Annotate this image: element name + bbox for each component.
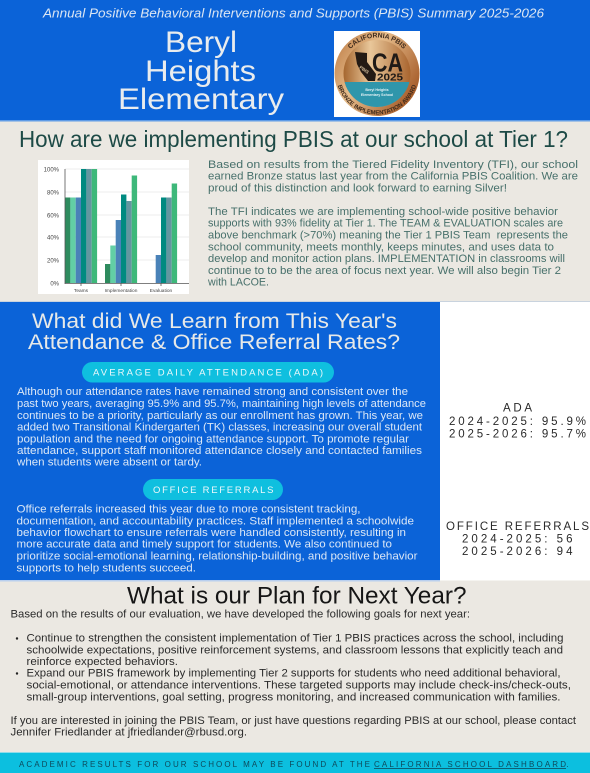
school name: Elementary — [118, 83, 284, 116]
footer band: . — [566, 760, 569, 769]
header band — [0, 0, 590, 122]
text block: attendance: continues to be a priority, particularly as our enrollment has grown. This year, we — [17, 410, 423, 422]
text block: attendance: Although our attendance rates have remained strong and consistent over the — [17, 386, 408, 398]
heading: attendance and referrals — [28, 309, 400, 354]
text block: TFI results: school community, meets monthly, keeps minutes, and uses data to — [208, 241, 554, 253]
stats: ADA — [449, 403, 586, 441]
text block: TFI results: The TFI indicates we are implementing school-wide positive behavior — [208, 206, 558, 218]
list: goals: schoolwide expectations, positive reinforcement systems, and classroom lessons that explicitly teach and — [26, 644, 563, 656]
footer band — [0, 752, 590, 773]
list: goals: Continue to strengthen the consistent implementation of Tier 1 PBIS practices across the school, including — [26, 633, 564, 645]
text block: TFI results: proud of this distinction and look forward to earning Silver! — [208, 182, 507, 194]
badge: California PBIS bronze award — [334, 31, 420, 117]
badge: California PBIS bronze award: Beryl Heights — [365, 88, 389, 92]
panel: attendance and referrals — [0, 301, 590, 582]
text block: TFI results — [207, 159, 578, 289]
stats: ADA: 2025-2026: 95.7% — [449, 429, 586, 441]
badge: California PBIS bronze award: BRONZE IMPLEMENTATION AWARD — [338, 84, 416, 114]
heading: Tier 1: How are we implementing PBIS at our school at Tier 1? — [19, 126, 568, 152]
pill: office referrals — [143, 479, 283, 500]
text block: referrals: supports to help students succeed. — [16, 562, 196, 574]
text block: attendance: population and the need for ongoing attendance support. To promote regular — [17, 433, 410, 445]
text block: TFI results: supports with 93% fidelity at Tier 1. The TEAM & EVALUATION scales are — [208, 218, 563, 230]
bars: Teams — [65, 169, 97, 283]
text block: contact: If you are interested in joining the PBIS Team, or just have questions regarding PBIS at our school, please contact — [10, 715, 576, 727]
text block: attendance — [16, 386, 426, 469]
text block: referrals: Office referrals increased this year due to more consistent tracking, — [16, 504, 360, 516]
text block: TFI results: develop and monitor action plans. IMPLEMENTATION in classrooms will — [208, 253, 565, 265]
school name: Heights — [145, 55, 256, 88]
stats: office referrals: 2025-2026: 94 — [462, 546, 573, 558]
text block: TFI results: earned Bronze status last year from the California PBIS Coalition. We are — [208, 171, 578, 183]
text block: attendance: when students were absent or tardy. — [16, 457, 202, 469]
footer band: CALIFORNIA SCHOOL DASHBOARD — [374, 760, 566, 769]
text block: attendance: added two Transitional Kindergarten (TK) classes, increasing our overall student — [17, 422, 422, 434]
text block: TFI results: with LACOE. — [207, 277, 269, 289]
text block: referrals: more accurate data and timely support for students. We also continued to — [16, 539, 392, 551]
badge: California PBIS bronze award: CALIFORNIA PBIS — [348, 32, 406, 48]
bars: Evaluation — [156, 184, 177, 283]
pill: average daily attendance: AVERAGE DAILY ATTENDANCE (ADA) — [93, 368, 323, 378]
list: goals: reinforce expected behaviors. — [26, 656, 178, 668]
heading: plan for next year: What is our Plan for Next Year? — [127, 582, 466, 609]
bars: Implementation — [105, 176, 137, 283]
text block: TFI results: Based on results from the Tiered Fidelity Inventory (TFI), our school — [208, 159, 578, 171]
text block: referrals: behavior flowchart to ensure referrals were handled consistently, resulting in — [16, 527, 406, 539]
list: goals — [16, 633, 571, 703]
stats: ADA: 2024-2025: 95.9% — [449, 416, 586, 428]
text block: plan intro: Based on the results of our evaluation, we have developed the following goals for next year: — [10, 609, 470, 621]
badge: California PBIS bronze award: CA — [372, 48, 403, 78]
list: goals: small-group interventions, goal setting, progress monitoring, and increased communication with families. — [26, 691, 560, 703]
bar chart: TFI scales — [38, 160, 189, 294]
pill: office referrals: OFFICE REFERRALS — [153, 485, 274, 496]
heading: attendance and referrals: What did We Learn from This Year's — [32, 309, 397, 333]
bar chart: TFI scales: Teams — [74, 288, 89, 294]
stats: ADA: ADA — [503, 403, 532, 415]
text block: referrals — [16, 504, 418, 574]
stats: office referrals: 2024-2025: 56 — [462, 534, 572, 546]
text block: contact — [10, 715, 576, 739]
list: goals: social-emotional, or attendance interventions. These targeted supports may include check-ins/check-outs, — [26, 679, 571, 691]
footer band: ACADEMIC RESULTS FOR OUR SCHOOL MAY BE FOUND AT THE — [19, 760, 370, 769]
badge: California PBIS bronze award: Elementary School — [361, 93, 393, 97]
list: goals: Expand our PBIS framework by implementing Tier 2 supports for students who need additional behavioral, — [26, 668, 560, 680]
text block: referrals: documentation, and accountability practices. Staff implemented a schoolwide — [16, 515, 414, 527]
bar chart: TFI scales: 80% — [47, 190, 60, 196]
stats: office referrals: OFFICE REFERRALS — [446, 521, 589, 533]
text block: attendance: past two years, averaging 95.9% and 95.7%, maintaining high levels of attendance — [17, 398, 426, 410]
heading: attendance and referrals: Attendance & Office Referral Rates? — [28, 330, 400, 354]
bar chart: TFI scales: Implementation — [105, 288, 138, 294]
text block: referrals: prioritize social-emotional learning, relationship-building, and positive behavior — [16, 550, 418, 562]
stats: office referrals — [446, 521, 589, 558]
pill: average daily attendance — [82, 362, 334, 382]
badge: California PBIS bronze award: 2025 — [377, 72, 403, 84]
bar chart: TFI scales: Evaluation — [150, 288, 173, 294]
text block: TFI results: continue to to be the area of focus next year. We will also begin Tier 2 — [208, 265, 561, 277]
bar chart: TFI scales: 60% — [47, 214, 60, 220]
subtitle: Annual Positive Behavioral Interventions and Supports (PBIS) Summary 2025-2026 — [42, 6, 544, 20]
bar chart: TFI scales: 40% — [47, 236, 60, 242]
bar chart: TFI scales: 0% — [50, 282, 60, 288]
text block: TFI results: above benchmark (>70%) meaning the Tier 1 PBIS Team represents the — [208, 230, 568, 242]
text block: attendance: attendance, support staff monitored attendance closely and contacted families — [17, 445, 422, 457]
bar chart: TFI scales: 100% — [44, 168, 60, 174]
bar chart: TFI scales: 20% — [47, 258, 60, 264]
school name — [118, 26, 284, 116]
text block: contact: Jennifer Friedlander at jfriedlander@rbusd.org. — [10, 727, 247, 739]
badge: California PBIS bronze award: PBIS — [358, 65, 370, 75]
school name: Beryl — [165, 26, 237, 59]
